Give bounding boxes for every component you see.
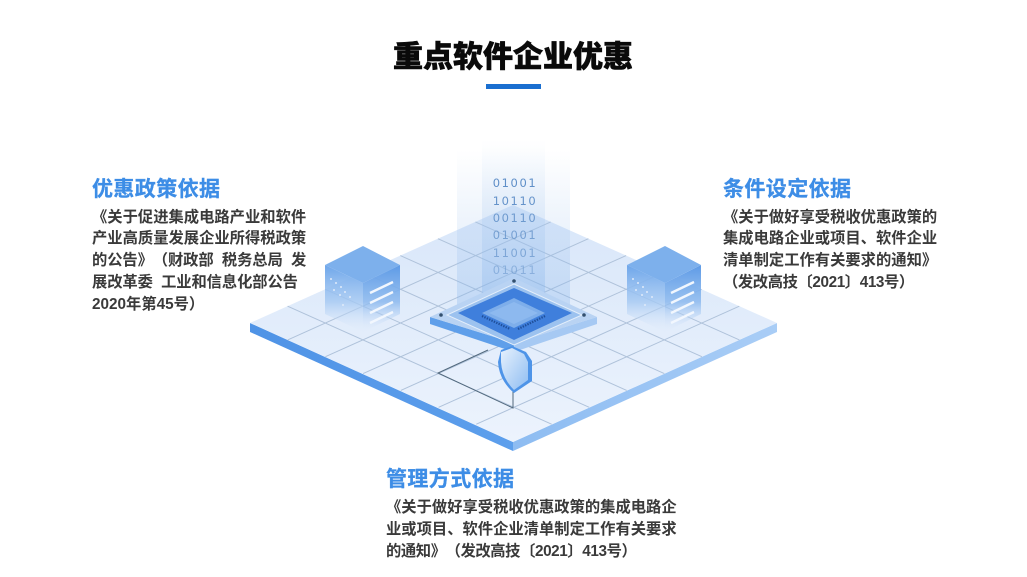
heading: condition basis: 条件设定依据 <box>723 178 851 201</box>
binary digits: 11001 <box>493 246 537 260</box>
binary digits <box>493 176 537 277</box>
right server <box>627 246 701 332</box>
text: management basis: 《关于做好享受税收优惠政策的集成电路企 <box>386 499 677 516</box>
connector lines <box>438 350 513 408</box>
text: policy basis: 展改革委 工业和信息化部公告 <box>92 274 298 291</box>
text: policy basis: 产业高质量发展企业所得税政策 <box>92 230 306 247</box>
binary digits: 01011 <box>493 263 537 277</box>
data beam <box>457 140 570 315</box>
platform <box>250 205 777 451</box>
text: condition basis: （发改高技〔2021〕413号） <box>723 274 914 291</box>
chip <box>430 278 597 352</box>
panel: condition setting basis <box>723 178 937 291</box>
text: condition basis: 《关于做好享受税收优惠政策的 <box>723 209 937 226</box>
binary digits: 01001 <box>493 228 537 242</box>
title: 重点软件企业优惠 <box>393 41 633 74</box>
heading: management basis: 管理方式依据 <box>386 468 514 491</box>
text: management basis: 业或项目、软件企业清单制定工作有关要求 <box>386 521 677 538</box>
text: policy basis: 《关于促进集成电路产业和软件 <box>92 209 306 226</box>
icon: shield <box>498 346 532 393</box>
left server <box>325 246 400 332</box>
text: policy basis: 2020年第45号） <box>92 296 204 313</box>
text: management basis: 的通知》（发改高技〔2021〕413号） <box>386 543 636 560</box>
binary digits: 10110 <box>493 194 537 208</box>
text: condition basis: 清单制定工作有关要求的通知》 <box>723 252 937 269</box>
binary digits: 01001 <box>493 176 537 190</box>
text: condition basis: 集成电路企业或项目、软件企业 <box>723 230 937 247</box>
text: policy basis: 的公告》（财政部 税务总局 发 <box>92 252 306 269</box>
text: management basis <box>386 498 677 560</box>
title underline <box>486 84 541 89</box>
heading: policy basis: 优惠政策依据 <box>92 178 220 201</box>
text: condition basis <box>723 208 937 291</box>
text: policy basis <box>92 208 306 313</box>
panel: preferential policy basis <box>92 178 306 313</box>
binary digits: 00110 <box>493 211 537 225</box>
panel: management method basis <box>386 468 677 560</box>
